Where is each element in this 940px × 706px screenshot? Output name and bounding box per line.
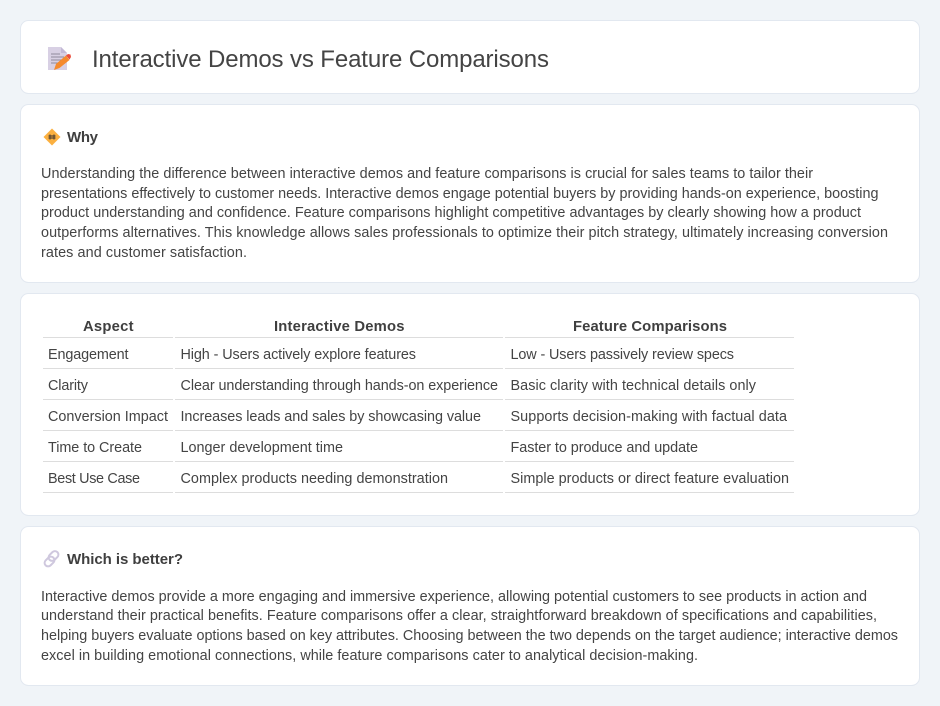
text block: why paragraph: product understanding and confidence. Feature comparisons highlight competitive advantages by clearly showing how a product — [41, 205, 861, 221]
text block: why paragraph: Understanding the difference between interactive demos and feature comparisons is crucial for sales teams to tailor their — [41, 166, 813, 182]
text block: which is better paragraph — [41, 589, 898, 664]
title: Interactive Demos vs Feature Comparisons — [92, 46, 549, 73]
text block: which is better paragraph: Interactive demos provide a more engaging and immersive experience, allowing potential customers to see products in action and — [41, 589, 867, 605]
panel: which is better — [20, 526, 920, 686]
table row: time to create: Time to Create — [48, 440, 142, 456]
panel: comparison table — [20, 294, 920, 516]
icon: warning diamond — [44, 128, 60, 146]
text block: which is better paragraph: helping buyers evaluate options based on key attributes. Choosing between the two depends on the target audience; interactive demos — [41, 628, 898, 644]
text block: which is better paragraph: understand their practical benefits. Feature comparisons offer a clear, straightforward breakdown of specifications and capabilities, — [41, 608, 877, 624]
table row: best use case — [43, 471, 794, 493]
text block: which is better paragraph: excel in building emotional connections, while feature comparisons cater to analytical decision-making. — [41, 648, 698, 664]
table row: clarity: Clear understanding through hands-on experience — [180, 378, 498, 394]
table header row: Interactive Demos — [274, 319, 404, 335]
table row: best use case: Complex products needing demonstration — [180, 471, 448, 487]
text block: why paragraph: outperforms alternatives. This knowledge allows sales professionals to optimize their pitch strategy, ultimately increasing conversion — [41, 225, 888, 241]
table row: engagement: Engagement — [48, 347, 128, 363]
table row: best use case: Best Use Case — [48, 471, 140, 487]
table row: time to create: Faster to produce and update — [510, 440, 698, 456]
table row: clarity — [43, 378, 794, 400]
table row: engagement — [43, 347, 794, 369]
table row: conversion impact — [43, 409, 794, 431]
text block: why paragraph: rates and customer satisfaction. — [41, 245, 247, 261]
icon: link — [43, 550, 60, 568]
table header row — [43, 319, 794, 338]
table row: engagement: High - Users actively explore features — [180, 347, 416, 363]
text block: why paragraph — [41, 166, 888, 261]
table row: time to create: Longer development time — [180, 440, 343, 456]
heading: why: Why — [67, 129, 99, 146]
table row: engagement: Low - Users passively review specs — [510, 347, 734, 363]
table row: time to create — [43, 440, 794, 462]
table row: conversion impact: Conversion Impact — [48, 409, 168, 425]
table row: best use case: Simple products or direct feature evaluation — [510, 471, 789, 487]
table row: conversion impact: Supports decision-making with factual data — [510, 409, 787, 425]
icon: memo with pencil — [48, 47, 71, 70]
table row: clarity: Clarity — [48, 378, 89, 394]
table row: conversion impact: Increases leads and sales by showcasing value — [180, 409, 481, 425]
table row: clarity: Basic clarity with technical details only — [510, 378, 757, 394]
panel: header — [20, 20, 920, 94]
panel: why — [20, 104, 920, 282]
text block: why paragraph: presentations effectively to customer needs. Interactive demos engage potential buyers by providing hands-on experience, boosting — [41, 186, 878, 202]
table header row: Feature Comparisons — [573, 319, 727, 335]
table header row: Aspect — [83, 319, 134, 335]
heading: which is better: Which is better? — [67, 551, 183, 568]
